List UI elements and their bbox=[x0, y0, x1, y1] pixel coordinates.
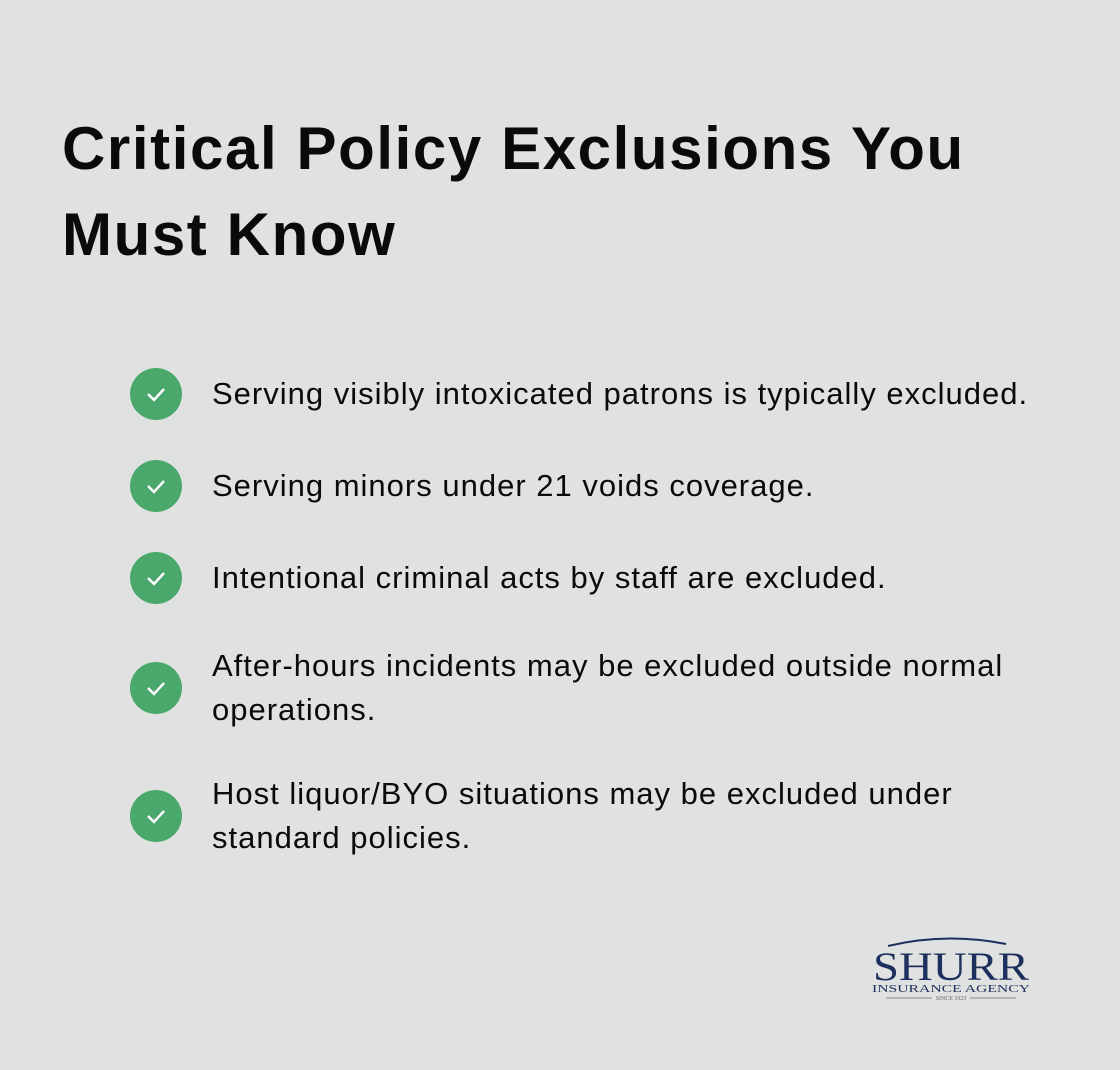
logo: SHURR bbox=[873, 944, 1029, 989]
item 1 bbox=[130, 368, 1028, 420]
text: Host liquor/BYO situations may be excluded under standard policies. bbox=[212, 776, 953, 855]
text: After-hours incidents may be excluded outside normal operations. bbox=[212, 648, 1003, 727]
logo bbox=[872, 938, 1030, 1002]
text: Intentional criminal acts by staff are excluded. bbox=[212, 560, 887, 595]
icon: check bbox=[130, 368, 182, 420]
icon: check bbox=[130, 552, 182, 604]
item 2 bbox=[130, 460, 814, 512]
logo: SINCE 1923 bbox=[936, 996, 966, 1002]
item 4 bbox=[130, 648, 1003, 727]
text: Serving visibly intoxicated patrons is typically excluded. bbox=[212, 376, 1028, 411]
icon: check bbox=[130, 662, 182, 714]
text: Serving minors under 21 voids coverage. bbox=[212, 468, 814, 503]
title bbox=[62, 115, 965, 268]
icon: check bbox=[130, 790, 182, 842]
title: Must Know bbox=[62, 201, 396, 268]
icon: check bbox=[130, 460, 182, 512]
logo: INSURANCE AGENCY bbox=[872, 983, 1030, 995]
item 3 bbox=[130, 552, 887, 604]
item 5 bbox=[130, 776, 953, 855]
title: Critical Policy Exclusions You bbox=[62, 115, 965, 182]
